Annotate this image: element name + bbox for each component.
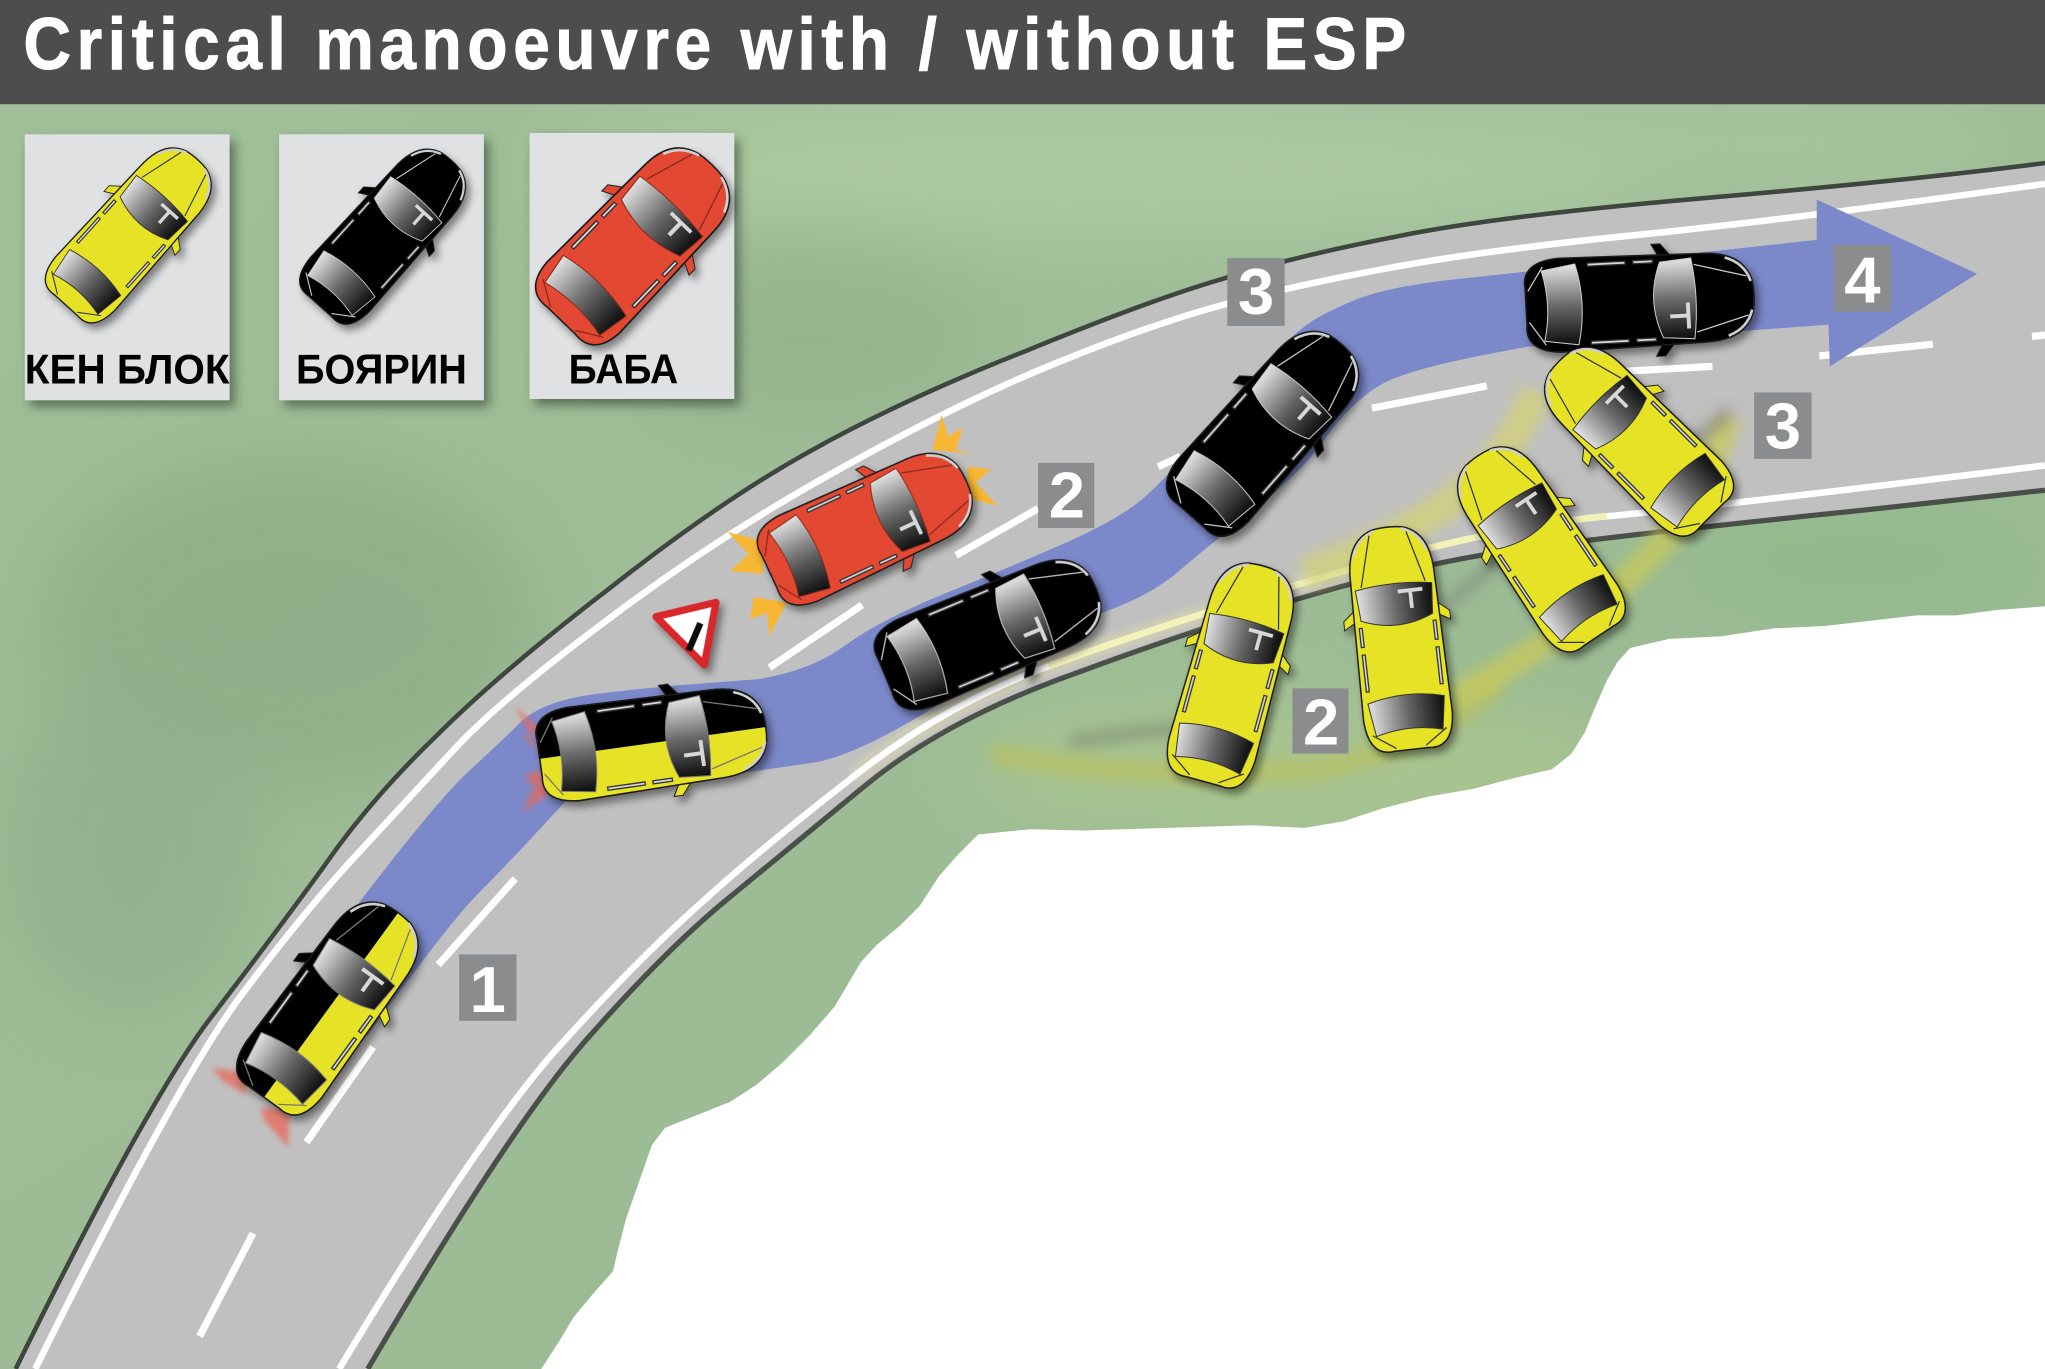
skid marks without ESP bbox=[991, 391, 1728, 773]
badge 2 ESP: 2 bbox=[1049, 459, 1085, 532]
badge 3 ESP: 3 bbox=[1238, 255, 1274, 328]
badge 2 ESP bbox=[1038, 459, 1094, 532]
car: yellow skid 3 bbox=[1433, 426, 1643, 666]
car: red obstacle bbox=[745, 429, 990, 623]
badge 3 no ESP: 3 bbox=[1765, 390, 1801, 463]
car: black ESP position 2 bbox=[863, 536, 1117, 727]
legend card: yellow car bbox=[25, 127, 233, 400]
legend card: red car bbox=[517, 122, 755, 399]
car: yellow/black ESP position 1 bbox=[218, 880, 444, 1130]
car: black ESP position 4 bbox=[1523, 239, 1757, 363]
badge 4 bbox=[1834, 243, 1891, 316]
car: yellow skid 1 bbox=[1152, 552, 1314, 796]
badge 4: 4 bbox=[1844, 243, 1881, 316]
badge 1 bbox=[459, 953, 516, 1026]
legend card: black car bbox=[279, 129, 487, 400]
car: yellow/black ESP braking bbox=[532, 672, 774, 814]
title bar: Critical manoeuvre with / without ESP bbox=[23, 3, 1406, 85]
brake flares: red bbox=[211, 707, 554, 1147]
legend card: black car: БОЯРИН bbox=[296, 345, 467, 392]
icon: yield warning triangle bbox=[656, 602, 716, 665]
ESP trajectory: blue arrow bbox=[291, 199, 1977, 1035]
badge 2 no ESP: 2 bbox=[1303, 685, 1339, 758]
title bar bbox=[0, 0, 2045, 104]
car: yellow skid 4 bbox=[1521, 324, 1750, 553]
car: yellow skid 2 bbox=[1334, 521, 1465, 756]
hazard flashes: orange bbox=[728, 415, 998, 636]
legend card: red car: БАБА bbox=[569, 345, 678, 392]
car: black ESP position 3 bbox=[1149, 307, 1384, 553]
badge 1: 1 bbox=[470, 953, 506, 1026]
legend card: yellow car: КЕН БЛОК bbox=[25, 345, 230, 392]
badge 3 no ESP bbox=[1754, 390, 1812, 463]
badge 3 ESP bbox=[1227, 255, 1285, 328]
white cut-out area bbox=[541, 606, 2045, 1369]
badge 2 no ESP bbox=[1292, 685, 1349, 758]
